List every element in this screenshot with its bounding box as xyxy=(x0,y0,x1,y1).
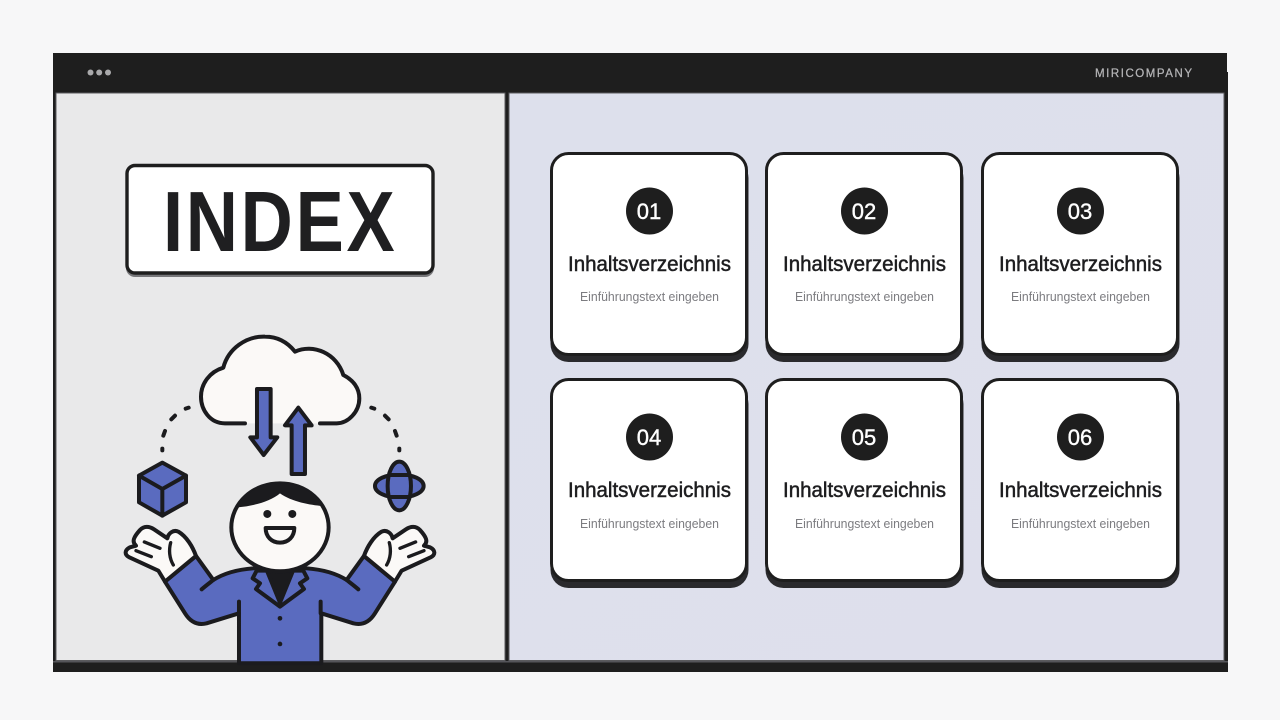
number badge 05: 05 xyxy=(852,425,876,450)
illustration: person with cloud xyxy=(126,337,434,663)
number badge 04 xyxy=(626,414,673,460)
card 6 xyxy=(982,380,1180,588)
card text 06: Einführungstext eingeben xyxy=(1011,516,1150,531)
number badge 02 xyxy=(841,188,888,234)
window frame xyxy=(53,53,1228,672)
dotted arc left xyxy=(162,408,189,450)
number badge 03 xyxy=(1057,188,1104,234)
number badge 06: 06 xyxy=(1068,425,1092,450)
title box xyxy=(126,166,434,277)
card heading 02: Inhaltsverzeichnis xyxy=(783,253,946,276)
hair xyxy=(238,483,323,507)
head xyxy=(231,483,329,571)
card 1 xyxy=(550,154,748,362)
card text 05: Einführungstext eingeben xyxy=(795,516,934,531)
number badge 01: 01 xyxy=(637,199,661,224)
number badge 01 xyxy=(626,188,673,234)
card heading 01: Inhaltsverzeichnis xyxy=(568,253,731,276)
card text 01: Einführungstext eingeben xyxy=(580,289,719,304)
number badge 04: 04 xyxy=(637,425,661,450)
number badge 05 xyxy=(841,414,888,460)
mouth xyxy=(266,528,294,543)
panel: left xyxy=(56,93,505,660)
icon: orbit xyxy=(375,462,424,510)
card heading 03: Inhaltsverzeichnis xyxy=(999,253,1162,276)
buttons xyxy=(278,616,282,646)
card 4 xyxy=(550,380,748,588)
card heading 04: Inhaltsverzeichnis xyxy=(568,479,731,502)
window dots xyxy=(88,70,111,76)
card text 02: Einführungstext eingeben xyxy=(795,289,934,304)
eyes xyxy=(263,510,296,518)
number badge 03: 03 xyxy=(1068,199,1092,224)
brand name: MIRICOMPANY xyxy=(1095,68,1192,80)
person body xyxy=(165,556,395,663)
right hand xyxy=(364,527,434,582)
card 5 xyxy=(766,380,964,588)
card 2 xyxy=(766,154,964,362)
collar and tie xyxy=(253,570,307,607)
card text 03: Einführungstext eingeben xyxy=(1011,289,1150,304)
panel: right xyxy=(509,93,1224,660)
card text 04: Einführungstext eingeben xyxy=(580,516,719,531)
dotted arc right xyxy=(371,408,399,450)
arrow: up xyxy=(285,408,312,474)
icon: cloud xyxy=(201,337,359,423)
title: INDEX xyxy=(163,174,397,269)
arrow: down xyxy=(250,389,277,455)
card heading 05: Inhaltsverzeichnis xyxy=(783,479,946,502)
number badge 02: 02 xyxy=(852,199,876,224)
number badge 06 xyxy=(1057,414,1104,460)
left hand xyxy=(126,527,196,582)
card 3 xyxy=(982,154,1180,362)
icon: cube xyxy=(139,463,186,516)
card heading 06: Inhaltsverzeichnis xyxy=(999,479,1162,502)
